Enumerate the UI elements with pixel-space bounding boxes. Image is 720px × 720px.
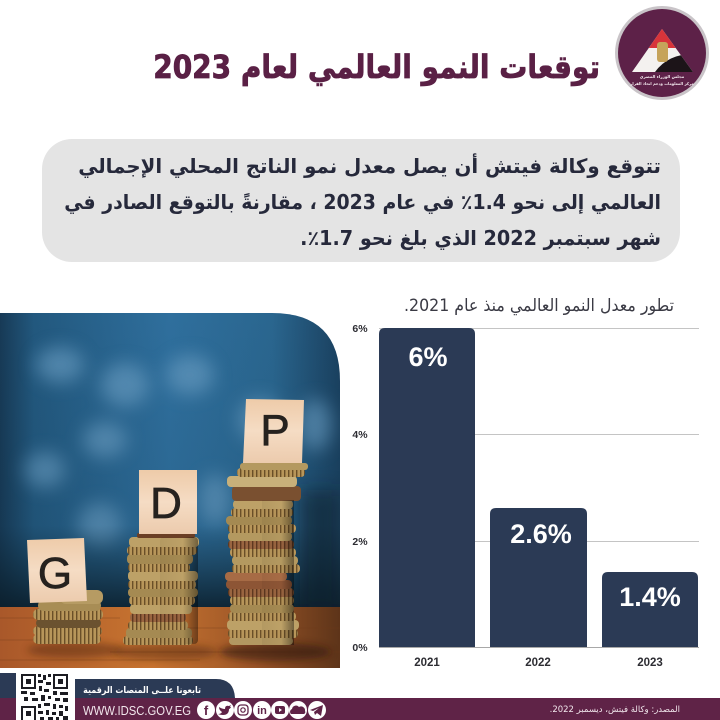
x axis labels (414, 657, 663, 669)
title: توقعات النمو العالمي لعام 2023 (153, 49, 600, 87)
y axis labels: 6% (352, 323, 368, 335)
x axis labels: 2021 (414, 657, 440, 669)
bar: 2021 (379, 328, 475, 647)
social media icons (197, 701, 326, 719)
y axis labels: 4% (352, 429, 368, 441)
social media icons: f (204, 703, 209, 718)
bar: 2022 (490, 508, 587, 647)
logo: cabinet IDSC emblem (615, 6, 709, 100)
bar: 2022: 2.6% (510, 519, 572, 549)
tile: P: P (260, 406, 290, 455)
coin stack: G (33, 590, 103, 644)
panel: summary text: العالمي إلى نحو 1.4٪ في عام 2023 ، مقارنةً بالتوقع الصادر في (64, 190, 661, 214)
tile: G (27, 538, 87, 603)
footer band (0, 673, 720, 720)
QR code (16, 672, 75, 720)
panel: summary text (42, 139, 680, 262)
social media icons: in (257, 705, 267, 717)
bar: 2023 (602, 572, 698, 647)
tile: G: G (38, 549, 72, 598)
logo: cabinet IDSC emblem: مركز المعلومات ودعم اتخاذ القرار (629, 81, 694, 86)
website address: WWW.IDSC.GOV.EG (83, 704, 191, 718)
coin stack: P (225, 463, 308, 645)
tile: P (243, 399, 304, 463)
tile: D: D (150, 479, 182, 528)
x axis labels: 2022 (525, 657, 551, 669)
panel: summary text: شهر سبتمبر 2022 الذي بلغ نحو 1.7٪. (300, 227, 661, 251)
y axis labels (352, 323, 368, 654)
table (0, 607, 340, 668)
bar: 2023: 1.4% (619, 582, 681, 612)
panel: summary text: تتوقع وكالة فيتش أن يصل معدل نمو الناتج المحلي الإجمالي (78, 152, 661, 179)
tile: D (139, 470, 197, 534)
photo: GDP tiles on coin stacks (0, 313, 340, 668)
bar chart: global growth rate (352, 323, 699, 669)
y axis labels: 0% (352, 642, 368, 654)
y axis labels: 2% (352, 536, 368, 548)
coin stack: D (123, 533, 199, 645)
source note: المصدر: وكالة فيتش، ديسمبر 2022. (550, 705, 680, 715)
x axis labels: 2023 (637, 657, 663, 669)
chart title: تطور معدل النمو العالمي منذ عام 2021. (404, 295, 674, 316)
bar: 2021: 6% (408, 342, 448, 372)
follow us label: تابعونا علــى المنصات الرقمية (83, 686, 201, 696)
logo: cabinet IDSC emblem: مجلس الوزراء المصري (640, 74, 685, 79)
